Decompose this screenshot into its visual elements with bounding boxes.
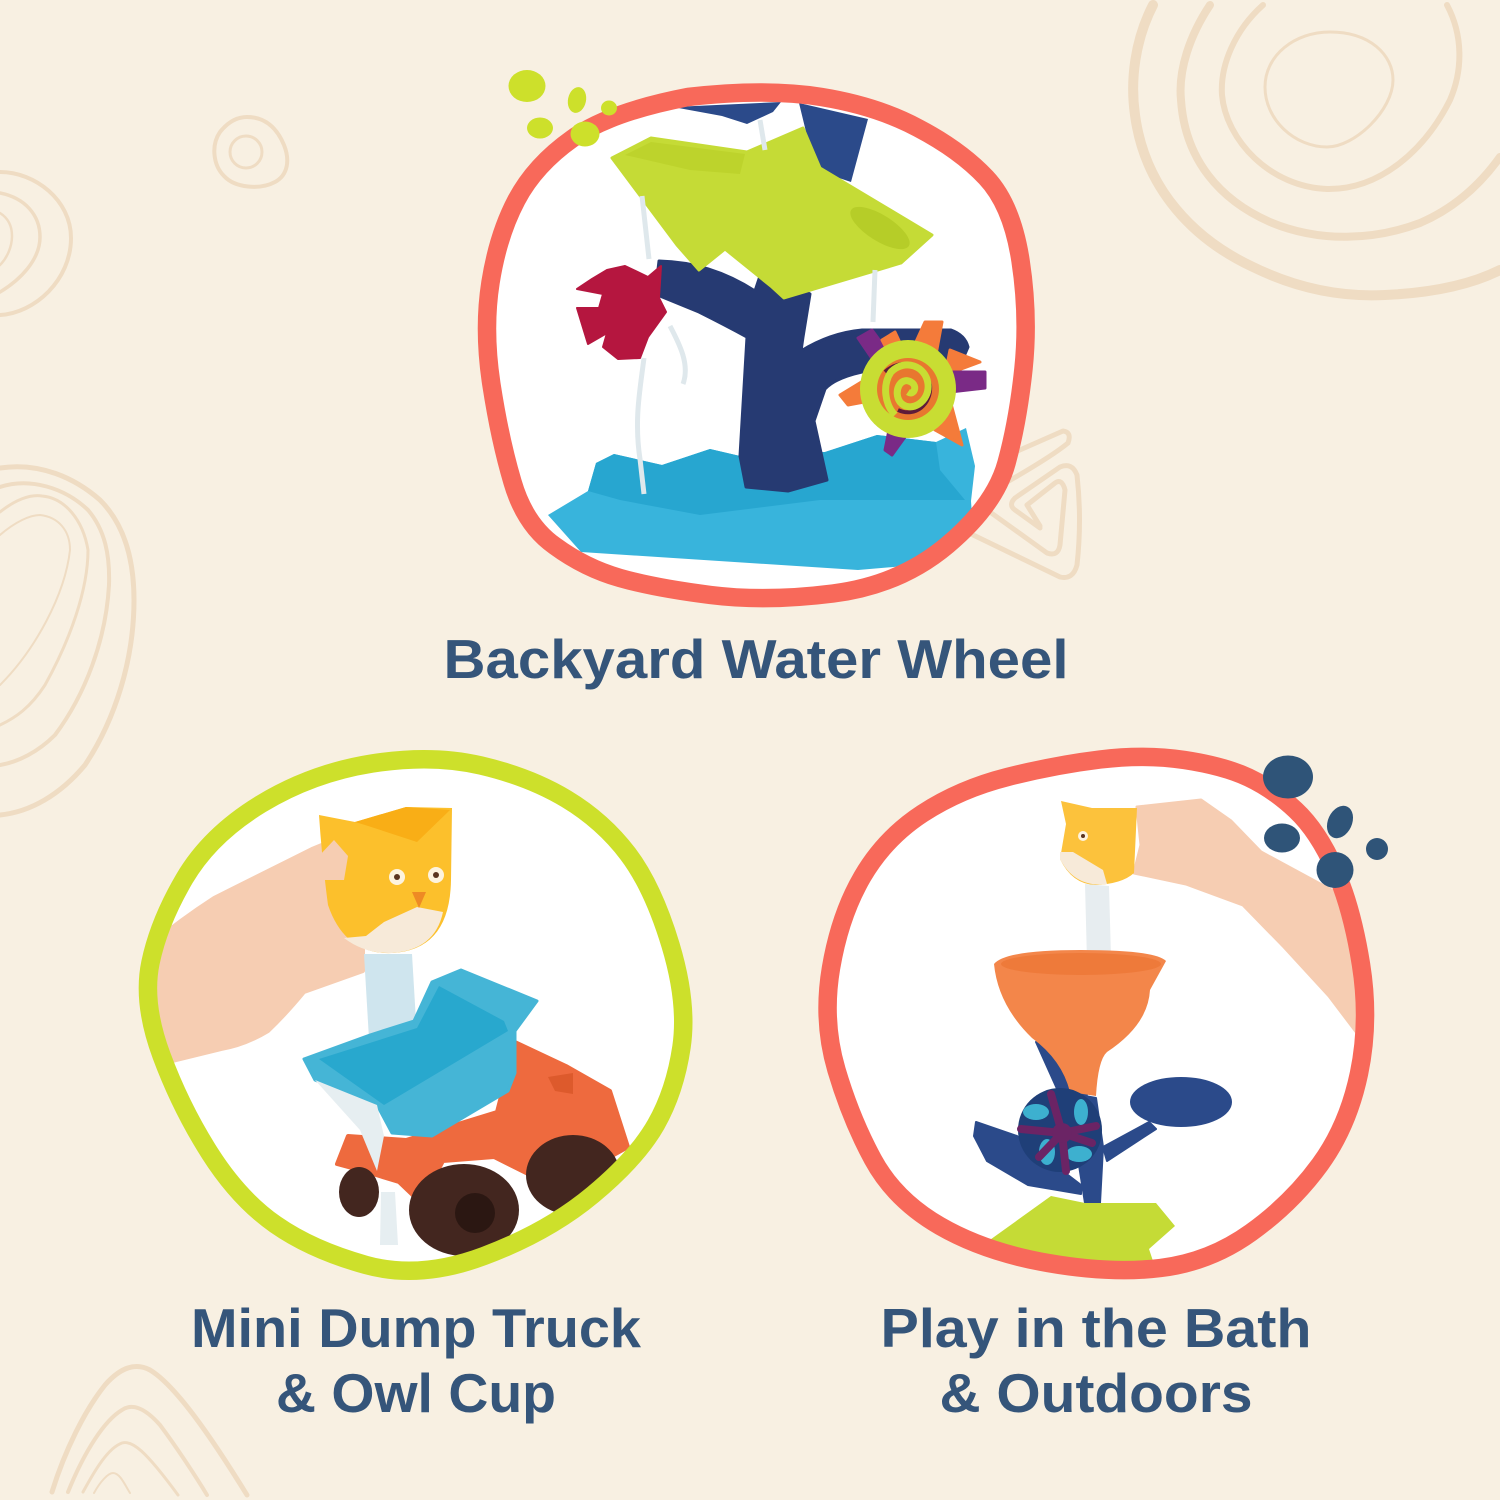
blue water base — [548, 428, 975, 570]
heading: Backyard Water Wheel: Backyard Water Wheel — [444, 628, 1068, 690]
panel: Play in the Bath and Outdoors photo — [828, 757, 1370, 1270]
hand and arm — [1134, 800, 1370, 1045]
navy top cup — [673, 102, 781, 124]
water stream — [364, 954, 416, 1034]
heading: Mini Dump Truck and Owl Cup — [191, 1297, 641, 1424]
water spilling over truck — [315, 1080, 398, 1245]
heading: Mini Dump Truck and Owl Cup: & Owl Cup — [276, 1362, 556, 1424]
orange truck — [337, 1042, 628, 1203]
panel: Backyard Water Wheel photo — [487, 92, 1026, 598]
heading: Mini Dump Truck and Owl Cup: Mini Dump Truck — [191, 1297, 641, 1359]
orange funnel — [994, 950, 1166, 1096]
panel: Mini Dump Truck and Owl Cup photo — [148, 759, 683, 1271]
small owl cup — [1060, 801, 1137, 885]
heading: Play in the Bath and Outdoors: & Outdoors — [940, 1362, 1252, 1424]
heading: Play in the Bath and Outdoors — [880, 1297, 1312, 1424]
water stream — [1085, 884, 1111, 950]
lime boat piece — [991, 1196, 1175, 1261]
crimson wheel — [577, 266, 666, 359]
heading: Play in the Bath and Outdoors: Play in the Bath — [880, 1297, 1312, 1359]
spiral wheel — [840, 322, 985, 455]
lime boat — [612, 128, 932, 298]
navy stand — [974, 1042, 1231, 1203]
hand — [150, 840, 363, 1061]
truck wheels — [339, 1135, 620, 1256]
purple and teal pinwheel — [1018, 1088, 1102, 1172]
decorative dots: lime — [508, 70, 617, 146]
dump bed — [304, 970, 537, 1136]
navy upper trunk — [799, 103, 868, 182]
water trickles — [637, 120, 875, 494]
decorative dots: navy — [1263, 756, 1388, 888]
owl cup — [319, 807, 452, 953]
navy tree trunk — [655, 261, 968, 491]
